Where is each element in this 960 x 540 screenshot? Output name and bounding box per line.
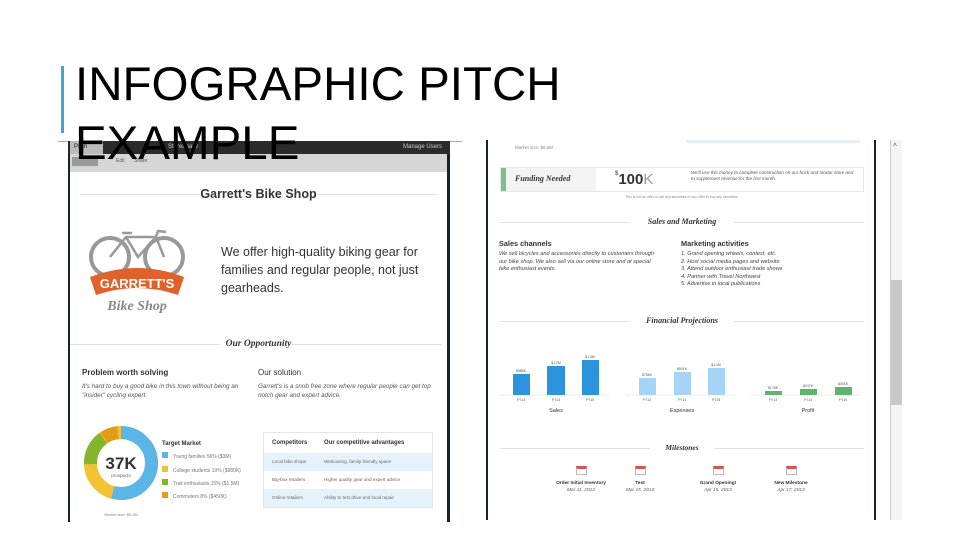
competitors table: Big-box retailers — [272, 477, 305, 482]
logo — [89, 230, 185, 314]
funding box — [500, 167, 864, 192]
bar chart: $685K — [516, 369, 527, 373]
marketing activities: Marketing activities — [681, 239, 749, 248]
milestones — [556, 466, 808, 493]
competitors table: Local bike shops — [272, 459, 306, 464]
bar chart: $901K — [677, 367, 688, 371]
bar chart — [500, 355, 861, 414]
marketing activities: 1. Grand opening wheels, contest, etc. — [681, 251, 776, 257]
bar chart: $1.4M — [585, 355, 595, 359]
legend: Trail enthusiasts 15% ($1.5M) — [173, 481, 239, 487]
toolbar: Manage Users — [403, 144, 442, 150]
marketing activities: 5. Advertise in local publications — [681, 281, 760, 287]
bar chart: FY13 — [769, 398, 777, 402]
heading: Sales and Marketing: Sales and Marketing — [648, 217, 716, 226]
legend — [162, 440, 241, 500]
right screenshot panel: This is not an offer to sell any securities of any offer to buy any securities. — [625, 195, 739, 199]
milestones: Apr 15, 2013 — [704, 488, 732, 493]
competitors table: Ability to test drive and local repair — [324, 495, 394, 500]
marketing activities: 4. Partner with Travel Northwest — [681, 274, 760, 280]
legend: College students 19% ($980K) — [173, 468, 241, 474]
accent bar — [61, 66, 64, 133]
bar chart: $1.1M — [711, 363, 721, 367]
sales channels: Sales channels — [499, 239, 552, 248]
scrollbar: ^ — [893, 142, 897, 151]
sub toolbar: Share — [134, 158, 147, 164]
right screenshot panel — [486, 140, 902, 520]
bar chart: FY15 — [839, 398, 847, 402]
toolbar — [68, 141, 450, 154]
donut chart — [84, 426, 158, 517]
heading: Garrett's Bike Shop: Garrett's Bike Shop — [200, 187, 317, 201]
bar chart: $758K — [642, 373, 653, 377]
bar chart: FY15 — [586, 398, 594, 402]
funding box: Funding Needed — [515, 174, 570, 183]
bar chart: $301K — [838, 382, 849, 386]
marketing activities: 3. Attend outdoor enthusiast trade shows — [681, 266, 782, 272]
milestones: New Milestone — [774, 481, 808, 486]
heading: Our Opportunity: Our Opportunity — [226, 339, 291, 349]
sub toolbar: Edit — [116, 158, 125, 164]
bar chart: FY13 — [643, 398, 651, 402]
donut chart: Market size: $6.5M — [104, 512, 138, 517]
milestones: Mar 15, 2013 — [626, 488, 654, 493]
sub toolbar — [70, 154, 447, 172]
donut chart: 37K — [105, 454, 137, 473]
competitors table: Higher quality gear and expert advice — [324, 477, 400, 482]
competitors table — [263, 432, 433, 508]
sales channels — [499, 239, 654, 272]
logo: Bike Shop — [106, 299, 167, 314]
scrollbar — [890, 140, 902, 520]
frame — [486, 140, 488, 520]
competitors table: Our competitive advantages — [324, 440, 404, 446]
toolbar: Storeboard — [168, 144, 198, 150]
left screenshot panel — [58, 141, 462, 522]
title: INFOGRAPHIC PITCH EXAMPLE — [75, 58, 561, 170]
solution: Our solution — [258, 368, 301, 377]
milestones: Apr 17, 2013 — [777, 488, 805, 493]
toolbar: Pitch — [74, 144, 87, 150]
bar chart: FY14 — [804, 398, 812, 402]
bar chart: FY14 — [552, 398, 560, 402]
bar chart: $1.2M — [551, 361, 561, 365]
milestones: Mar 11, 2013 — [567, 488, 595, 493]
milestones: Order Initial Inventory — [556, 481, 606, 486]
problem: It's hard to buy a good bike in this town without being an "insider" cycling expert. — [82, 383, 238, 399]
milestones: Grand Opening! — [700, 481, 736, 486]
legend: Commuters 8% ($450K) — [173, 494, 227, 500]
bar chart: Sales — [549, 408, 563, 414]
sales channels: We sell bicycles and accessories directly to customers through our bike shop. We also sell via our online store and at special bike enthusiast events. — [499, 251, 654, 272]
bar chart: Expenses — [670, 408, 694, 414]
competitors table: Competitors — [272, 440, 307, 446]
market size: Market size: $6.5M — [515, 145, 553, 150]
solution — [258, 368, 431, 399]
bar chart: $178K — [768, 386, 779, 390]
donut chart: prospects — [111, 473, 132, 478]
frame — [58, 141, 462, 142]
heading: Milestones: Milestones — [665, 443, 699, 452]
marketing activities — [681, 239, 782, 287]
funding box: We'll use this money to complete construction on our brick and mortar store and to supplement revenue for the first month. — [691, 170, 853, 181]
bar chart: FY14 — [678, 398, 686, 402]
heading: Financial Projections: Financial Projections — [646, 316, 718, 325]
logo: GARRETT'S — [100, 276, 175, 291]
problem: Problem worth solving — [82, 368, 168, 377]
competitors table: Welcoming, family-friendly space — [324, 459, 391, 464]
problem — [82, 368, 238, 399]
funding box: $100K — [615, 171, 653, 188]
marketing activities: 2. Host social media pages and website — [681, 259, 780, 265]
tagline: We offer high-quality biking gear for families and regular people, not just gearheads. — [221, 245, 418, 295]
legend: Target Market — [162, 441, 201, 447]
bar chart: $247K — [803, 384, 814, 388]
competitors table: Online retailers — [272, 495, 303, 500]
bar chart: FY15 — [712, 398, 720, 402]
bar chart: FY13 — [517, 398, 525, 402]
milestones: Test — [635, 481, 645, 486]
bar chart: Profit — [802, 408, 815, 414]
legend: Young families 56% ($3M) — [173, 454, 231, 460]
solution: Garrett's is a snob free zone where regular people can get top notch gear and expert advice. — [258, 383, 431, 399]
